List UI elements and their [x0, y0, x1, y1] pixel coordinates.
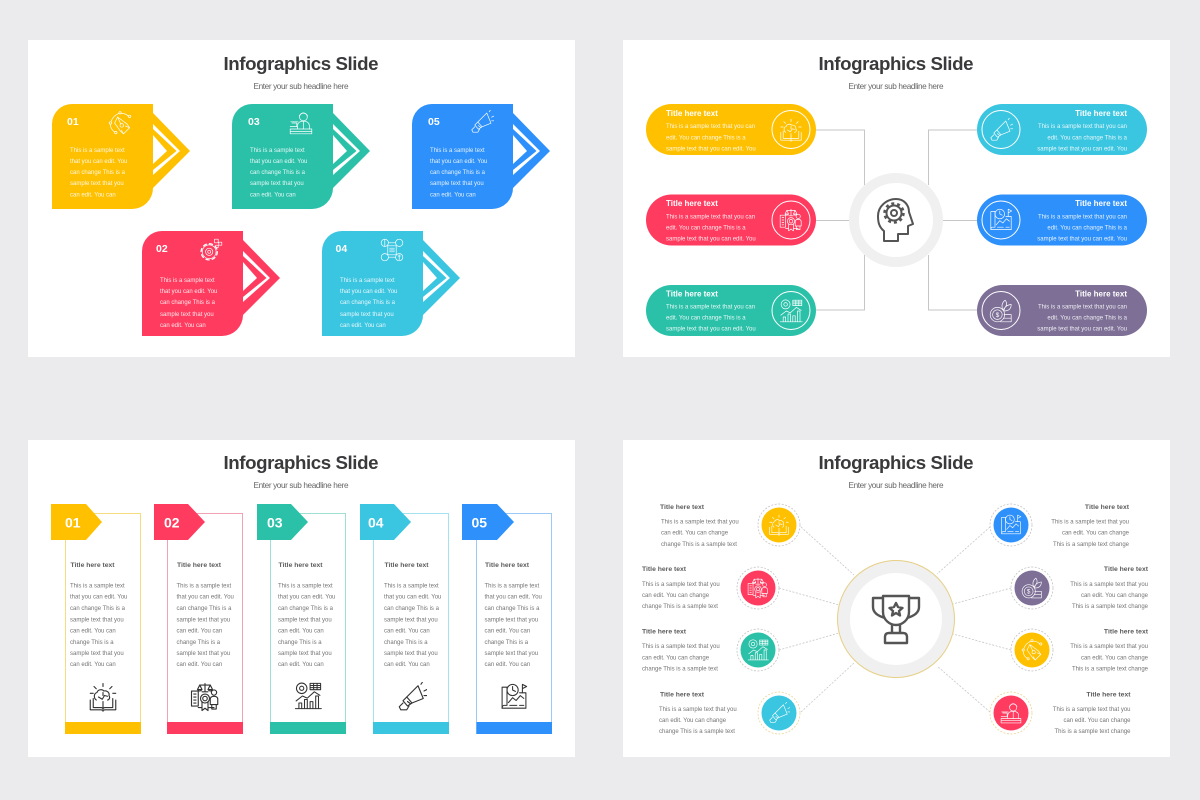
node: red worker: [990, 692, 1032, 734]
card 03: This is a sample text: [250, 148, 305, 154]
pill: red: edit. You can change This is a: [666, 226, 746, 232]
panel: numbered columns slide: [28, 440, 575, 757]
card 04: This is a sample text: [340, 278, 395, 284]
card 05: 05: [428, 116, 440, 128]
pill: teal: edit. You can change This is a: [666, 316, 746, 322]
node: sky megaphone: [758, 692, 800, 734]
panel: mind map slide: [623, 40, 1170, 357]
column 02: This is a sample text: [176, 584, 232, 590]
heading: Infographics Slide: [224, 452, 378, 473]
card 02: 02: [156, 243, 168, 255]
text: left row 2: Title here text: [642, 566, 687, 573]
column 02: Title here text: [177, 562, 222, 569]
text: right row 2: can edit. You can change: [1081, 593, 1149, 599]
column 05: change This is a: [484, 640, 529, 646]
text: left row 4: [659, 692, 737, 735]
column 03: can edit. You can: [278, 628, 324, 634]
card 01: can change This is a: [70, 170, 126, 176]
card 05: sample text that you: [430, 181, 484, 187]
text: right row 3: [1070, 629, 1149, 672]
text: right row 1: can edit. You can change: [1062, 530, 1130, 536]
column 03: Title here text: [278, 562, 323, 569]
card 02: [142, 231, 280, 336]
card 02: can edit. You can: [160, 323, 206, 329]
card 04: sample text that you: [340, 312, 394, 318]
text: right row 2: Title here text: [1104, 566, 1149, 573]
panel: trophy radial slide: [623, 440, 1170, 757]
column 05: can change This is a: [484, 606, 540, 612]
node: purple coin: [1011, 567, 1053, 609]
column 01: change This is a: [70, 640, 114, 646]
text: left row 1: Title here text: [660, 504, 705, 511]
column 01: can change This is a: [70, 606, 126, 612]
text: right row 3: can edit. You can change: [1081, 656, 1149, 662]
text: left row 2: This is a sample text that you: [642, 582, 720, 588]
card 01: can edit. You can: [70, 192, 116, 198]
pill: purple: sample text that you can edit. You: [1037, 326, 1127, 332]
text: right row 4: This is a sample text change: [1054, 729, 1131, 735]
column 05: can edit. You can: [484, 628, 530, 634]
column 01: can edit. You can: [70, 662, 116, 668]
column 03: can edit. You can: [278, 662, 324, 668]
pill: blue: Title here text: [1075, 199, 1127, 208]
pill: sky: This is a sample text that you can: [1038, 124, 1127, 130]
connector lines: [816, 130, 977, 310]
card 04: can change This is a: [340, 300, 396, 306]
text: right row 4: Title here text: [1086, 692, 1131, 699]
pill: yellow: [646, 104, 816, 155]
pill: purple: edit. You can change This is a: [1047, 316, 1128, 322]
card 04: 04: [336, 243, 347, 255]
column 01: Title here text: [70, 562, 115, 569]
pill: yellow: edit. You can change This is a: [666, 136, 746, 142]
pill: red: Title here text: [666, 199, 718, 208]
column 04: This is a sample text: [384, 584, 439, 590]
column 01: sample text that you: [70, 618, 124, 624]
card 01: sample text that you: [70, 181, 124, 187]
column 02: sample text that you: [176, 618, 230, 624]
column 03: [257, 504, 346, 734]
sub headline: Enter your sub headline here: [254, 82, 349, 91]
heading: Infographics Slide: [224, 53, 378, 74]
column 02: change This is a: [176, 640, 221, 646]
column 03: change This is a: [278, 640, 322, 646]
column 01: [51, 504, 141, 734]
pill: sky: sample text that you can edit. You: [1037, 146, 1127, 152]
text: right row 2: This is a sample text that you: [1070, 582, 1148, 588]
text: left row 1: [660, 504, 739, 548]
card 03: 03: [248, 116, 260, 128]
card 03: can change This is a: [250, 170, 306, 176]
heading: Infographics Slide: [818, 452, 974, 473]
node: blue map: [990, 504, 1032, 546]
text: right row 3: This is a sample text that you: [1070, 644, 1148, 650]
column 03: can change This is a: [278, 606, 334, 612]
text: left row 3: This is a sample text that you: [642, 644, 720, 650]
card 01: that you can edit. You: [70, 159, 127, 165]
card 05: can change This is a: [430, 170, 486, 176]
text: right row 4: [1053, 692, 1131, 735]
column 04: can change This is a: [384, 606, 440, 612]
text: right row 1: This is a sample text that you: [1051, 520, 1129, 526]
text: left row 1: change This is a sample text: [661, 542, 737, 548]
sub headline: Enter your sub headline here: [848, 481, 944, 490]
card 03: that you can edit. You: [250, 159, 307, 165]
column 01: can edit. You can: [70, 628, 116, 634]
text: left row 4: Title here text: [660, 692, 705, 699]
pill: blue: edit. You can change This is a: [1047, 226, 1128, 232]
card 02: This is a sample text: [160, 278, 215, 284]
column 01: 01: [65, 514, 81, 530]
text: left row 2: can edit. You can change: [642, 593, 710, 599]
card 02: sample text that you: [160, 312, 214, 318]
text: right row 1: Title here text: [1085, 504, 1130, 511]
pill: purple: Title here text: [1075, 290, 1127, 298]
column 03: sample text that you: [278, 618, 332, 624]
card 04: that you can edit. You: [340, 289, 397, 295]
pill: teal: sample text that you can edit. You: [666, 326, 756, 332]
dashed connectors: [779, 527, 1011, 712]
card 02: that you can edit. You: [160, 289, 217, 295]
column 03: This is a sample text: [278, 584, 333, 590]
column 02: can edit. You can: [176, 662, 222, 668]
node: red scale: [737, 567, 779, 609]
text: right row 4: This is a sample text that you: [1053, 707, 1130, 713]
column 04: [360, 504, 449, 734]
card 05: This is a sample text: [430, 148, 485, 154]
card 04: can edit. You can: [340, 323, 386, 329]
column 02: can change This is a: [176, 606, 232, 612]
pill: yellow: sample text that you can edit. You: [666, 146, 756, 152]
card 01: This is a sample text: [70, 148, 125, 154]
column 03: sample text that you: [278, 651, 332, 657]
column 05: sample text that you: [484, 618, 538, 624]
sub headline: Enter your sub headline here: [254, 481, 349, 490]
text: left row 4: change This is a sample text: [659, 729, 735, 735]
column 02: sample text that you: [176, 651, 230, 657]
pill: blue: sample text that you can edit. You: [1037, 236, 1127, 242]
column 04: change This is a: [384, 640, 428, 646]
node: yellow book: [758, 504, 800, 546]
card 05: [412, 104, 550, 209]
pill: blue: This is a sample text that you can: [1038, 214, 1127, 220]
column 05: This is a sample text: [484, 584, 540, 590]
column 03: that you can edit. You: [278, 595, 335, 601]
column 02: [154, 504, 243, 734]
text: right row 3: This is a sample text change: [1072, 666, 1149, 672]
card 05: that you can edit. You: [430, 159, 487, 165]
pill: sky: [977, 104, 1147, 155]
column 05: [462, 504, 552, 734]
pill: sky: Title here text: [1075, 109, 1127, 118]
column 05: sample text that you: [484, 651, 538, 657]
column 02: that you can edit. You: [176, 595, 234, 601]
pill: yellow: This is a sample text that you can: [666, 124, 755, 130]
card 01: [52, 104, 190, 209]
text: left row 4: can edit. You can change: [659, 718, 727, 724]
text: left row 3: Title here text: [642, 629, 687, 636]
text: right row 1: [1051, 504, 1130, 548]
column 05: can edit. You can: [484, 662, 530, 668]
text: left row 4: This is a sample text that you: [659, 707, 737, 713]
column 05: 05: [472, 514, 487, 530]
column 03: 03: [267, 514, 283, 530]
pill: yellow: Title here text: [666, 109, 718, 118]
card 04: [322, 231, 460, 336]
pill: red: [646, 194, 816, 246]
column 02: 02: [164, 514, 180, 530]
column 01: This is a sample text: [70, 584, 125, 590]
pill: purple: [977, 285, 1147, 336]
card 03: [232, 104, 370, 209]
card 03: sample text that you: [250, 181, 304, 187]
central trophy: [838, 560, 954, 678]
card 02: can change This is a: [160, 300, 216, 306]
column 04: can edit. You can: [384, 662, 430, 668]
text: left row 2: change This is a sample text: [642, 604, 718, 610]
central head icon: [854, 178, 938, 262]
column 04: sample text that you: [384, 651, 438, 657]
pill: red: This is a sample text that you can: [666, 214, 755, 220]
column 05: that you can edit. You: [484, 595, 542, 601]
column 01: sample text that you: [70, 651, 124, 657]
text: right row 2: This is a sample text change: [1072, 604, 1149, 610]
text: left row 2: [642, 566, 720, 610]
sub headline: Enter your sub headline here: [848, 82, 944, 91]
text: left row 1: This is a sample text that you: [661, 520, 739, 526]
column 01: that you can edit. You: [70, 595, 127, 601]
pill: red: sample text that you can edit. You: [666, 236, 756, 242]
text: right row 4: can edit. You can change: [1063, 718, 1131, 724]
heading: Infographics Slide: [818, 53, 974, 74]
text: right row 3: Title here text: [1104, 629, 1149, 636]
pill: blue: [977, 194, 1147, 246]
column 02: can edit. You can: [176, 628, 222, 634]
pill: purple: This is a sample text that you can: [1038, 304, 1127, 310]
text: right row 1: This is a sample text change: [1053, 542, 1130, 548]
column 05: Title here text: [485, 562, 530, 569]
text: right row 2: [1070, 566, 1149, 610]
text: left row 1: can edit. You can change: [661, 530, 729, 536]
card 01: 01: [67, 116, 79, 128]
column 04: 04: [368, 514, 384, 530]
card 05: can edit. You can: [430, 192, 476, 198]
column 04: Title here text: [384, 562, 429, 569]
pill: sky: edit. You can change This is a: [1047, 136, 1128, 142]
pill: teal: Title here text: [666, 290, 718, 298]
text: left row 3: can edit. You can change: [642, 656, 710, 662]
pill: teal: [646, 285, 816, 336]
node: yellow pen: [1011, 629, 1053, 671]
column 04: sample text that you: [384, 618, 438, 624]
column 04: can edit. You can: [384, 628, 430, 634]
node: teal chart: [737, 629, 779, 671]
pill: teal: This is a sample text that you can: [666, 304, 755, 310]
text: left row 3: [642, 629, 720, 672]
column 04: that you can edit. You: [384, 595, 441, 601]
card 03: can edit. You can: [250, 192, 296, 198]
text: left row 3: change This is a sample text: [642, 666, 718, 672]
panel: arrow cards slide: [28, 40, 575, 357]
